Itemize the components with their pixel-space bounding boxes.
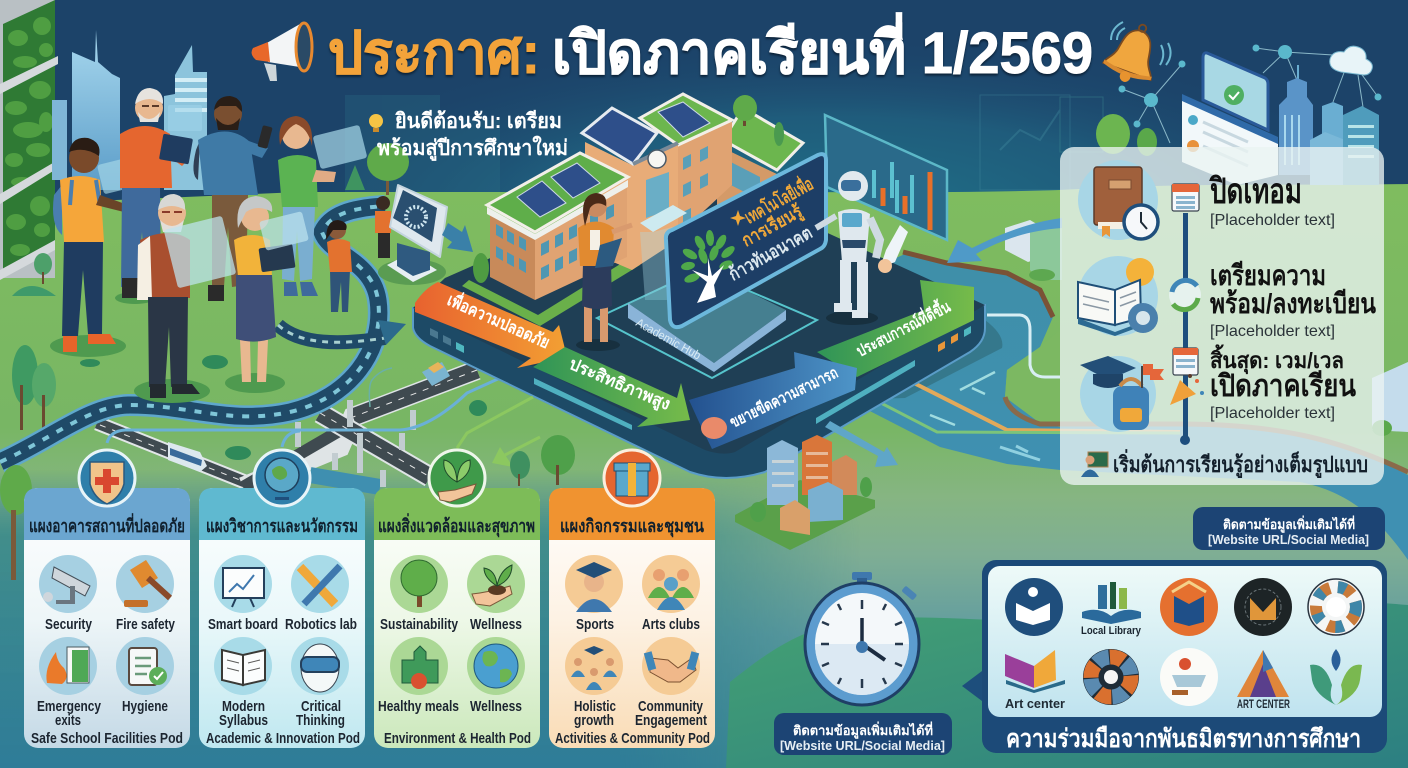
kiosk terminal [375,185,447,285]
lawn base [462,258,640,326]
partners panel [962,560,1387,753]
right side city and devices [1096,44,1382,185]
item: modern syllabus: Modern [222,698,265,715]
arrow to city [825,421,898,467]
pod footer: Activities & Community Pod [555,730,710,747]
right wing [717,145,785,245]
tree emblem [680,230,737,303]
icon: calendar 2 [1173,348,1198,375]
tower [585,142,678,270]
pod footer: Environment & Health Pod [384,730,531,747]
platform top [413,170,985,454]
person: older woman with tablet [225,196,309,393]
partner logo 2: Local Library [1081,625,1142,637]
follow box bottom: [Website URL/Social Media] [780,738,945,753]
lower left teal wash [0,470,900,768]
partner logo 1 [1005,578,1063,636]
trees centre bottom [0,435,575,580]
small car [422,362,450,386]
title [328,12,1093,86]
centre right block [678,120,732,235]
item: security [39,555,97,633]
follow box top right: [Website URL/Social Media] [1208,532,1369,547]
river bank [903,252,1053,317]
icon: teacher at board [1081,452,1108,477]
arrow: expand capability: ขยายขีดความสามารถ [726,363,841,432]
arrow: safety [415,282,567,368]
stopwatch [805,572,919,705]
pod: activities [549,450,715,748]
follow box top right: ติดตามข้อมูลเพิ่มเติมได้ที่ [1223,515,1355,533]
placeholder 2: [Placeholder text] [1210,323,1335,340]
item: modern syllabus: Syllabus [219,712,268,729]
person: man in blue sweater with phone [193,96,273,301]
partner logo 9 [1237,650,1290,711]
holographic sign: การเรียนรู้ [738,201,807,252]
item: community engagement [635,637,707,729]
school building [462,94,803,326]
pod badge [254,450,310,506]
pod badge [429,450,485,506]
arrow: better experience [817,280,974,377]
item: critical thinking: Critical [301,698,341,715]
pod: academic [199,450,365,748]
item: emergency exits: Emergency [37,698,102,715]
icon: cap and backpack [1080,356,1164,432]
icon: calendar [1172,184,1199,211]
icon: party popper [1170,374,1204,405]
partner logo 7 [1083,649,1139,705]
light strips [534,360,915,430]
heading: register: พร้อม/ลงทะเบียน [1210,288,1376,319]
platform shadow [840,320,1002,400]
analytics screen behind robot [825,115,947,240]
pod: environment [374,450,540,748]
glass academic hub pedestal: Academic Hub [634,315,704,363]
welcome message [369,109,568,162]
web page [1182,97,1278,185]
glow floor [597,270,817,378]
portico [640,205,687,232]
riverside buildings [1005,220,1062,281]
partner logo 10 [1310,649,1362,705]
partner logo 3 [1160,578,1218,636]
megaphone icon [252,23,312,81]
pod badge [79,450,135,506]
arrow: better experience: ประสบการณ์ที่ดีขึ้น [852,294,954,361]
item: sports [565,555,623,633]
network lines [1122,48,1378,143]
arrow: expand capability [689,352,857,449]
item: community engagement: Engagement [635,712,707,729]
item: holistic growth [565,637,623,729]
indicator lights [430,328,451,346]
pod heading: แผงกิจกรรมและชุมชน [560,516,705,538]
item: holistic growth: growth [574,712,614,729]
trees [1096,114,1130,154]
ground [0,184,1408,768]
person: woman in green shirt [278,116,367,296]
journey road path [0,206,385,462]
item: wellness plant: Wellness [470,616,522,633]
item: emergency exits [37,637,102,729]
path arrow head [378,320,406,345]
illustration: city skyline left [52,30,207,190]
icon: book and clock [1078,160,1158,240]
arrow: high efficiency [533,347,690,427]
teacher [576,193,632,351]
arrow into hub from right [947,218,1062,263]
placeholder 1: [Placeholder text] [1210,212,1335,229]
person: child on path [326,220,352,312]
heading: semester open: เปิดภาคเรียน [1210,370,1356,403]
holographic sign: เทคโนโลยีเพื่อ [740,171,817,227]
bell icon [1100,16,1171,90]
item: critical thinking [291,637,349,729]
item: holistic growth: Holistic [574,698,616,715]
pod heading: แผงอาคารสถานที่ปลอดภัย [29,513,185,536]
pod heading: แผงวิชาการและนวัตกรรม [206,516,358,536]
item: smart board [208,555,278,633]
person: older man in vest [134,194,236,403]
title: เปิดภาคเรียนที่ 1/2569 [552,12,1093,86]
pod footer: Academic & Innovation Pod [206,730,360,747]
item: modern syllabus [214,637,272,729]
person: older man with tablet [115,88,202,304]
item: security: Security [45,616,93,633]
holographic sign: ก้าวทันอนาคต [725,222,815,284]
central platform [413,170,985,478]
item: hygiene: Hygiene [122,698,168,715]
partner logo 8 [1160,648,1218,706]
pod badge [604,450,660,506]
pod heading: แผงสิ่งแวดล้อมและสุขภาพ [378,513,535,538]
pod: safe school [24,450,190,748]
item: arts clubs [642,555,700,633]
partner logo 2 [1081,582,1142,637]
arrow: safety: เพื่อความปลอดภัย [444,288,554,352]
item: healthy meals: Healthy meals [378,698,459,715]
item: emergency exits: exits [55,712,81,729]
left wing [490,212,535,300]
background teal glow [250,30,1408,230]
item: wellness globe: Wellness [470,698,522,715]
item: community engagement: Community [638,698,704,715]
follow box bottom [774,713,952,755]
item: fire safety [116,555,176,633]
follow box bottom: ติดตามข้อมูลเพิ่มเติมได้ที่ [793,721,933,739]
bottom right hill [726,602,1408,768]
pipes [987,315,1060,377]
item: sports: Sports [576,616,614,633]
partner logo 6 [1005,650,1065,711]
item: hygiene [116,637,174,715]
robot [816,171,908,325]
welcome message: ยินดีต้อนรับ: เตรียม [394,109,562,133]
heading: prepare: เตรียมความ [1210,260,1326,291]
title: ประกาศ: [328,21,540,86]
person: teen with backpack [50,138,143,357]
item: robotics lab: Robotics lab [285,616,357,633]
item: critical thinking: Thinking [296,712,345,729]
white building right [1372,362,1408,436]
icon: open book, sun and gear [1078,256,1158,336]
item: wellness globe [467,637,525,715]
cloud [1330,46,1372,75]
partner logo 6: Art center [1005,696,1065,711]
illustration: vertical garden wall [0,0,58,280]
background skyline grid [345,95,1103,195]
item: robotics lab [285,555,357,633]
isometric small city [735,435,875,550]
highway and overpass [97,368,500,487]
follow box top right [1193,507,1385,550]
partner logo 5 [1308,579,1364,635]
phone [1203,53,1268,130]
heading: end date: สิ้นสุด: เวม/เวล [1210,344,1344,375]
buildings [1297,65,1299,85]
platform side [413,305,985,478]
glass academic hub pedestal [628,225,786,372]
arrow from kiosk [442,223,473,252]
item: sustainability: Sustainability [380,616,459,633]
arrow: high efficiency: ประสิทธิภาพสูง [566,354,673,416]
item: smart board: Smart board [208,616,278,633]
river and water [780,252,1408,560]
item: healthy meals [378,637,459,715]
pod footer: Safe School Facilities Pod [31,730,183,747]
timeline panel [1060,147,1384,485]
small green arrows [457,397,540,467]
island [1005,330,1060,427]
trees near people [12,143,487,460]
bus on road [168,442,207,472]
item: sustainability [380,555,459,633]
partner logo 4 [1234,578,1292,636]
welcome message: พร้อมสู่ปีการศึกษาใหม่ [377,135,568,162]
heading: term close: ปิดเทอม [1208,172,1302,211]
holographic sign [666,154,826,327]
item: wellness plant [467,555,525,633]
timeline line [1180,213,1190,445]
item: fire safety: Fire safety [116,616,176,633]
icon: sync arrows [1169,279,1201,311]
item: arts clubs: Arts clubs [642,616,700,633]
partner logo 9: ART CENTER [1237,697,1290,711]
placeholder 3: [Placeholder text] [1210,405,1335,422]
